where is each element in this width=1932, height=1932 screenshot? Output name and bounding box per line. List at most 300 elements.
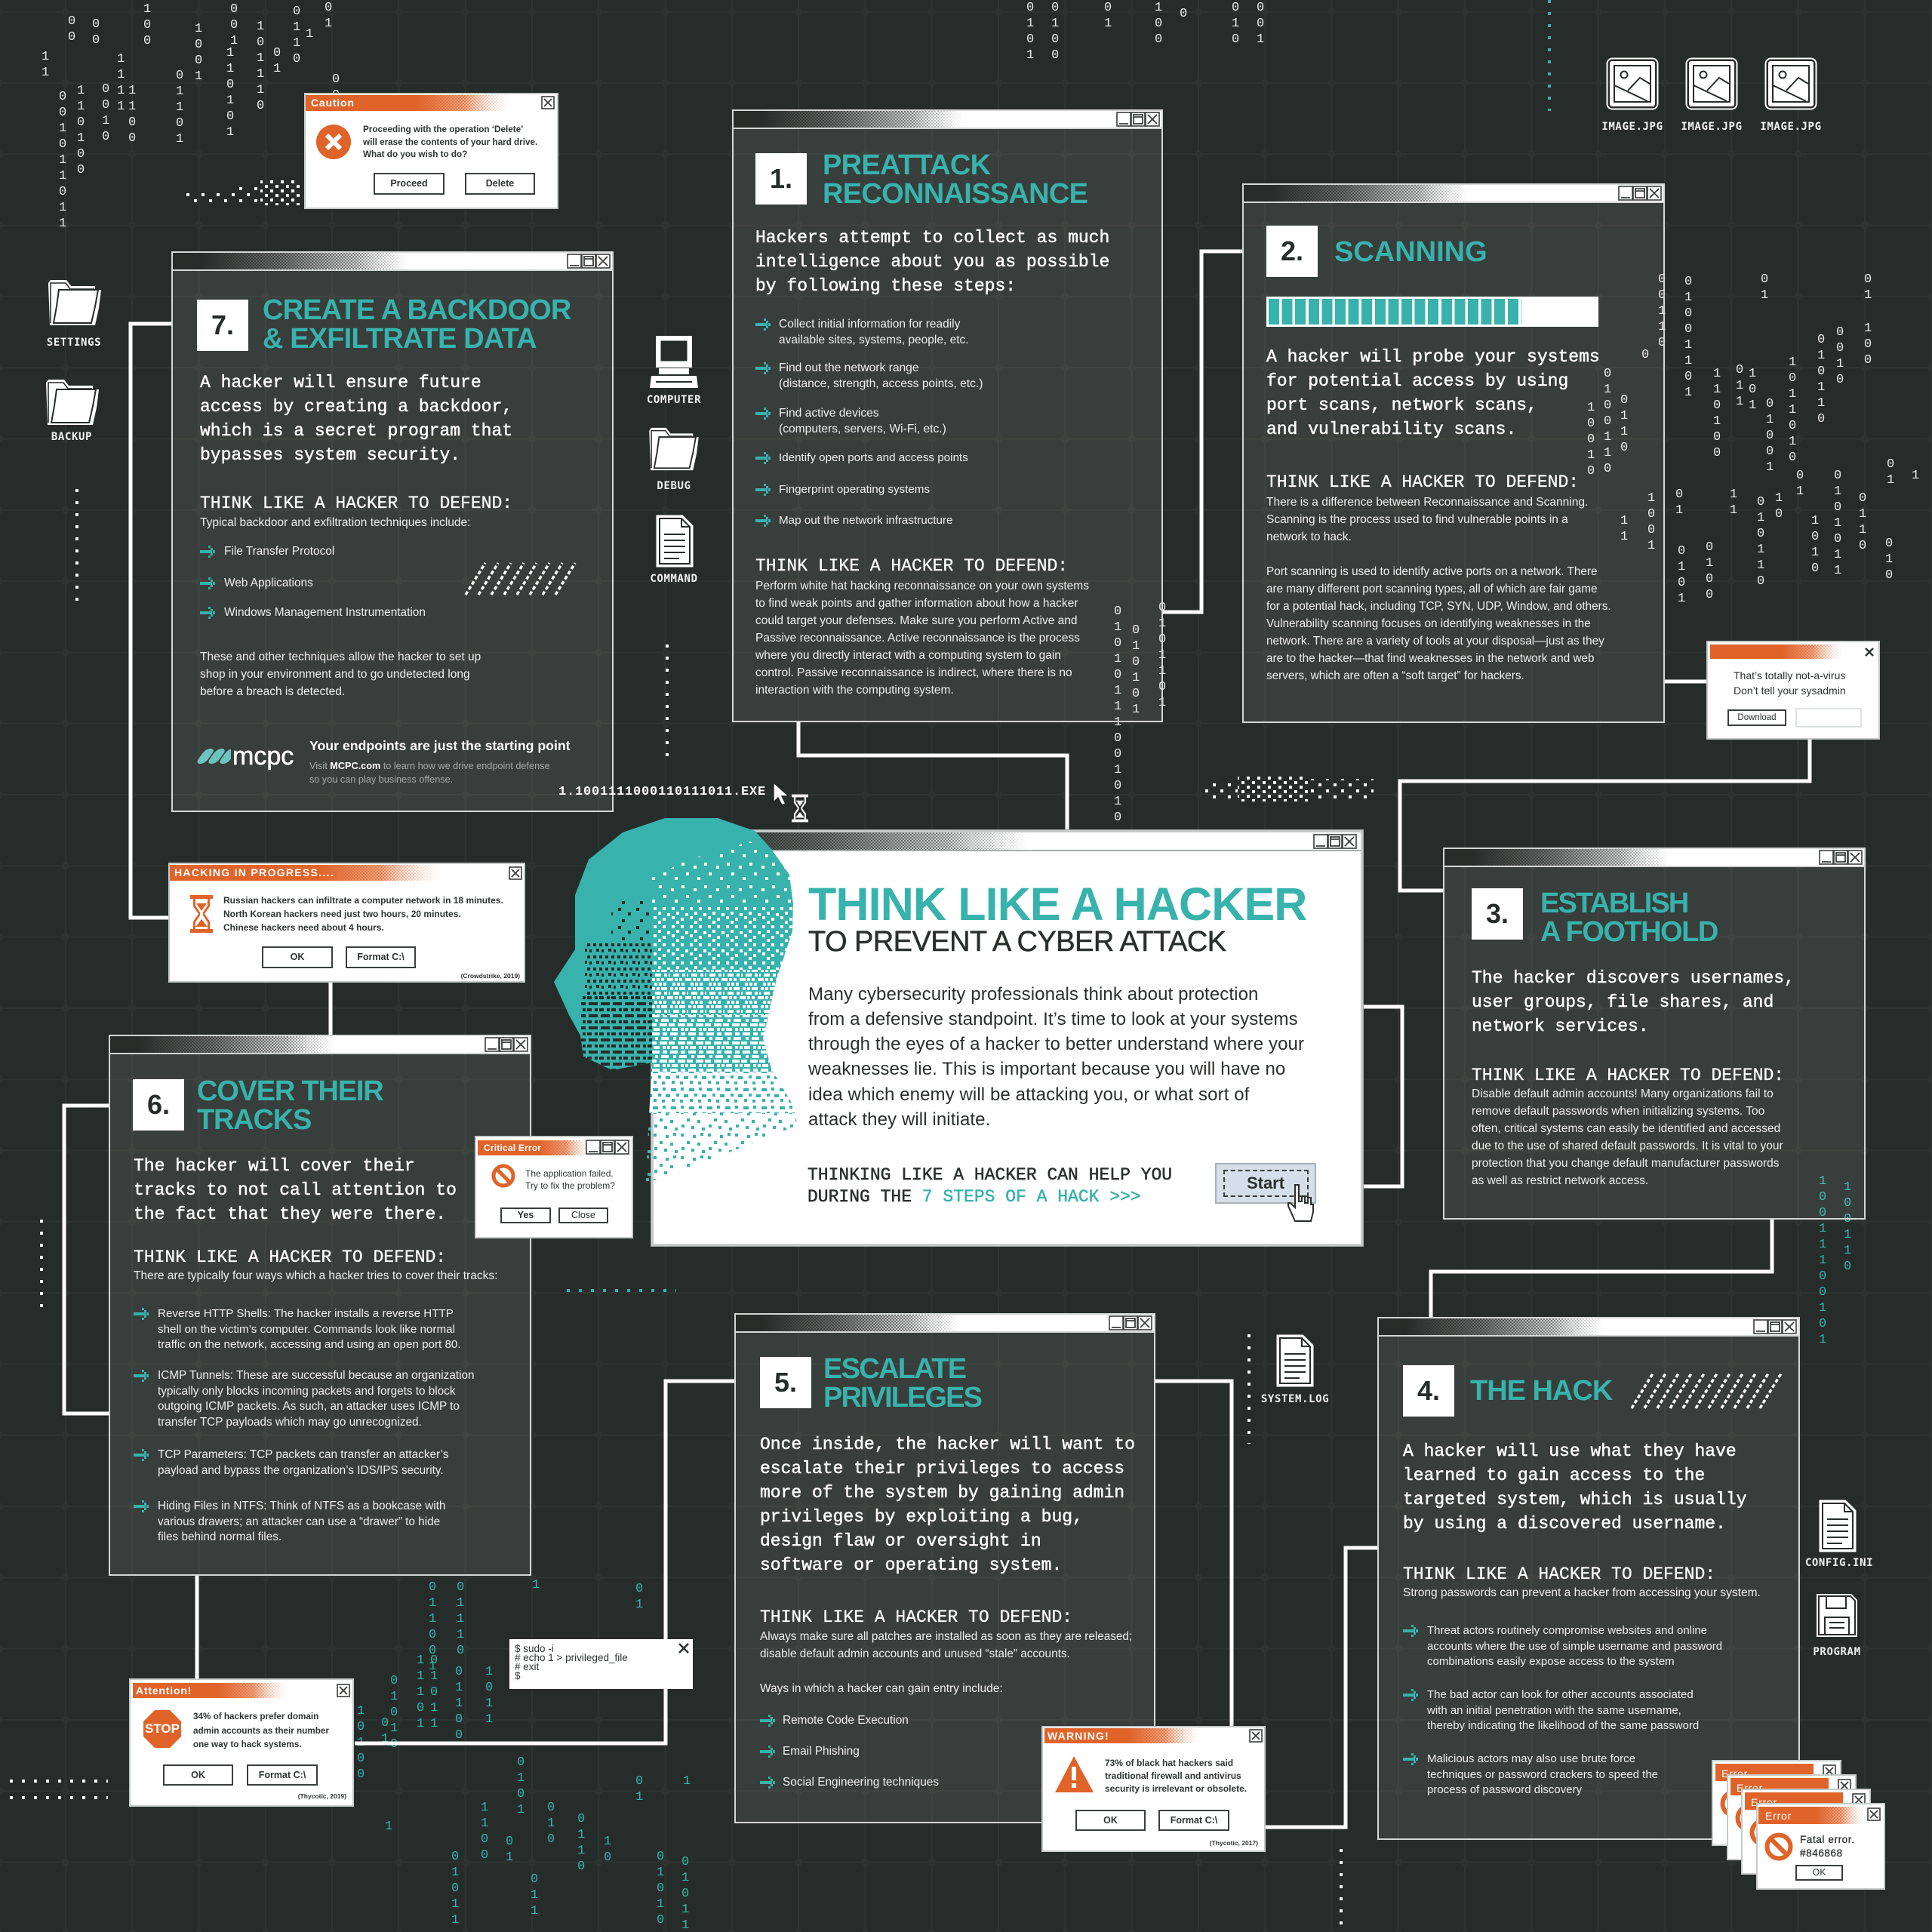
arrow bullets (755, 318, 771, 331)
binary rain: bottom teal: 10 (604, 1835, 611, 1865)
binary rain: right: 00110 (1658, 272, 1666, 350)
defend heading: THINK LIKE A HACKER TO DEFEND: (755, 556, 1068, 576)
icon: backup folder (26, 379, 117, 442)
icon: warning triangle (1054, 1755, 1094, 1793)
icon: system log document (1250, 1334, 1340, 1404)
bullet text: shell on the victim’s computer. Commands look like normal (158, 1322, 455, 1336)
defend text: Scanning is the process used to find vulnerable points in a (1266, 513, 1568, 526)
heading: SCANNING (1334, 236, 1487, 268)
icon: backup folder: BACKUP (51, 431, 92, 443)
intro text: from a defensive standpoint. It’s time to look at your systems (808, 1009, 1298, 1029)
binary rain: right: 1010 (1811, 514, 1819, 576)
bullet text: traffic on the network, accessing and using an open port 80. (158, 1338, 461, 1351)
lead text: bypasses system security. (200, 445, 460, 465)
binary rain: top left: 110100 (77, 84, 85, 177)
lead text: escalate their privileges to access (760, 1459, 1124, 1478)
icon: config document (1794, 1500, 1884, 1568)
intro text (808, 984, 1304, 1130)
panel: step 1 preattack reconnaissance: Map out the network infrastructure (779, 514, 952, 527)
buttons: OK (191, 1770, 205, 1780)
icon: image file 1 (1587, 57, 1678, 133)
bullet text: Collect initial information for readily (779, 318, 960, 331)
buttons (163, 1764, 318, 1786)
intro text: idea which enemy will be attacking you, or what sort of (808, 1084, 1249, 1105)
closing text: before a breach is detected. (200, 685, 345, 698)
binary rain: right: 110100 (1713, 367, 1721, 460)
message (363, 124, 537, 162)
defend text: could target your defenses. Make sure you perform Active and (755, 614, 1077, 627)
progress bar (1266, 297, 1598, 327)
icon: hand cursor (1286, 1183, 1315, 1223)
arrow bullets (1403, 1625, 1418, 1637)
binary rain: bottom teal: 0110 (577, 1812, 585, 1874)
step number (1266, 226, 1318, 277)
heading: ESTABLISH (1540, 888, 1687, 919)
binary rain: bottom teal: 01010 (390, 1674, 398, 1752)
dotted dither band: centre right (1205, 777, 1374, 801)
lead text: for potential access by using (1266, 371, 1568, 391)
icon: settings folder (29, 279, 119, 349)
defend text 2: servers, which are often a “soft target” for hackers. (1266, 669, 1524, 682)
bullet text: accounts where the use of simple username and password (1427, 1639, 1722, 1653)
panel: step 6 cover their tracks: Hiding Files in NTFS: Think of NTFS as a bookcase with (158, 1500, 445, 1512)
dialog: attention: Attention! (136, 1684, 192, 1697)
start button (1215, 1163, 1316, 1204)
dialog: caution: Caution (311, 97, 355, 109)
icon: computer: COMPUTER (647, 394, 701, 406)
white dither on head (651, 838, 801, 1075)
lead text: A hacker will use what they have (1403, 1441, 1737, 1461)
dialog: hacking in progress: HACKING IN PROGRESS.... (174, 866, 334, 878)
binary rain: right: 010110 (1757, 495, 1764, 589)
hatch decoration (1630, 1374, 1782, 1409)
icon: image file 1: IMAGE.JPG (1601, 121, 1663, 133)
head illustration (554, 818, 797, 1181)
lead text: by using a discovered username. (1403, 1514, 1726, 1534)
lead text (755, 228, 1109, 296)
panel: step 1 preattack reconnaissance: Find active devices (779, 407, 879, 420)
binary rain: right: 01 (1864, 272, 1872, 303)
binary rain: right: 1 (1912, 469, 1919, 483)
step number: 3. (1486, 898, 1509, 929)
buttons (374, 173, 535, 195)
panel: centre intro window (651, 830, 1363, 1246)
binary rain: top centre: 100 (1155, 1, 1162, 47)
message: traditional firewall and antivirus (1105, 1770, 1241, 1781)
panel: step 1 preattack reconnaissance: (computers, servers, Wi-Fi, etc.) (779, 423, 946, 435)
binary rain: top left: 01 (325, 1, 332, 31)
message: That’s totally not-a-virus (1734, 669, 1845, 681)
panel: step 4 the hack: techniques or password crackers to speed the (1427, 1767, 1658, 1781)
dialog: warning (1041, 1726, 1266, 1852)
icon: program floppy: PROGRAM (1813, 1646, 1861, 1658)
call to action: DURING THE 7 STEPS OF A HACK >>> (808, 1186, 1141, 1206)
icon: system log document: SYSTEM.LOG (1261, 1393, 1329, 1405)
download button and bar: Download (1737, 713, 1777, 722)
defend heading: THINK LIKE A HACKER TO DEFEND: (200, 494, 512, 513)
icon: command document (629, 515, 719, 584)
buttons: Format C:\ (357, 952, 405, 962)
binary rain: panel 1 edge: 010101 (1132, 623, 1140, 717)
binary rain: right: 10 (1775, 491, 1783, 521)
heading: & EXFILTRATE DATA (263, 323, 537, 355)
message: will erase the contents of your hard drive. (363, 137, 537, 147)
message: What do you wish to do? (363, 149, 467, 159)
lead text: privileges by exploiting a bug, (760, 1507, 1083, 1527)
arrow bullets (760, 1715, 775, 1727)
binary rain: bottom teal: 1 (532, 1578, 540, 1592)
icon: debug folder (629, 427, 719, 492)
binary rain: bottom teal: 1 (683, 1774, 691, 1789)
binary rain: right: 010 (1885, 537, 1893, 583)
defend text: due to the use of shared default passwords. It is vital to your (1472, 1140, 1783, 1152)
binary rain: top left: 101110 (257, 20, 264, 113)
intro text: through the eyes of a hacker to better understand where your (808, 1034, 1304, 1054)
bullet text: combinations easily expose access to the system (1427, 1655, 1675, 1668)
heading: CREATE A BACKDOOR (263, 294, 571, 326)
tagline: Your endpoints are just the starting point (309, 738, 571, 753)
binary rain: bottom teal: 01010 (657, 1850, 664, 1927)
binary rain: top left (42, 1, 340, 231)
message: The application failed. (525, 1168, 614, 1179)
mcpc note (309, 761, 550, 785)
solid teal face (554, 818, 793, 1072)
dialog: hacking in progress (168, 863, 525, 983)
binary rain: right: 0100 (1706, 540, 1713, 602)
dotted dither band: top left (186, 180, 300, 205)
step number: 1. (770, 163, 792, 194)
defend text (755, 580, 1089, 697)
step number: 7. (211, 309, 234, 340)
dialog: critical error: Critical Error (484, 1143, 541, 1153)
panel: step 1 preattack reconnaissance: Identify open ports and access points (779, 451, 968, 464)
binary rain: right: 010110 (1817, 333, 1825, 426)
defend text: Always make sure all patches are installed as soon as they are released; (760, 1630, 1132, 1643)
lead text: A hacker will ensure future (200, 373, 481, 392)
binary rain: bottom teal: 01 (635, 1582, 643, 1612)
panel: step 4 the hack: The bad actor can look for other accounts associated (1427, 1688, 1694, 1701)
dialog: warning: WARNING! (1048, 1730, 1109, 1742)
heading: COVER THEIR (197, 1075, 383, 1107)
arrow bullets (200, 546, 215, 558)
binary rain: right: 01001101 (1684, 275, 1692, 400)
dialog stack: errors (1712, 1760, 1885, 1890)
defend text: Perform white hat hacking reconnaissance on your own systems (755, 580, 1089, 592)
mcpc note: so you can play business offense. (309, 774, 453, 785)
icon: command document: COMMAND (650, 573, 698, 585)
close icon (678, 1643, 689, 1654)
binary rain: top centre: 0 (1180, 7, 1187, 21)
hatch decoration (465, 562, 577, 595)
lead text: Hackers attempt to collect as much (755, 228, 1109, 248)
step number: 4. (1417, 1375, 1440, 1406)
bullet text: Reverse HTTP Shells: The hacker installs a reverse HTTP (158, 1307, 454, 1320)
icon: image file 3 (1746, 57, 1836, 133)
lead text: tracks to not call attention to (134, 1180, 457, 1200)
lead text: by following these steps: (755, 276, 1016, 296)
binary rain: right: 0 (1641, 348, 1649, 362)
closing text (200, 651, 481, 698)
step number (1403, 1365, 1454, 1417)
message: one way to hack systems. (193, 1740, 302, 1749)
binary rain: bottom teal (357, 1578, 691, 1932)
lead text (760, 1435, 1135, 1575)
defend text 2: Port scanning is used to identify active ports on a network. There (1266, 565, 1597, 578)
binary rain: right: 0010 (1836, 325, 1844, 387)
binary rain: top centre: 0101 (1026, 1, 1034, 63)
intro text: weaknesses lie. This is important because you will have no (808, 1059, 1285, 1079)
panel: step 5 escalate privileges: Social Engineering techniques (783, 1776, 939, 1789)
binary rain: top left: 1001 (195, 22, 202, 84)
binary rain: top left: 00 (92, 17, 100, 48)
dialog: critical error (475, 1136, 633, 1238)
binary rain: top left: 001011011 (59, 90, 66, 231)
binary rain: bottom teal: 01 (506, 1835, 513, 1865)
buttons (500, 1208, 608, 1223)
dialog stack: errors: #846868 (1800, 1847, 1843, 1859)
lead text: Once inside, the hacker will want to (760, 1435, 1135, 1454)
bullet text (779, 318, 969, 346)
lead text (1266, 347, 1600, 439)
step number (755, 153, 807, 205)
terminal text: $ sudo -i (515, 1643, 554, 1654)
icon: error circle (316, 125, 351, 159)
terminal window (509, 1639, 693, 1689)
lead text: network services. (1472, 1017, 1649, 1036)
binary rain: right: 01 (1761, 272, 1768, 303)
buttons: OK (1103, 1815, 1118, 1826)
panel: step 6 cover their tracks: transfer TCP payloads which may go unrecognized. (158, 1416, 422, 1428)
binary rain: bottom teal: 01110 (457, 1580, 464, 1658)
binary rain: right: 0100110 (1604, 367, 1611, 476)
lead text (134, 1156, 457, 1224)
message: Don’t tell your sysadmin (1734, 685, 1846, 697)
binary rain: panel 1 edge: 0101101 (1158, 601, 1166, 710)
bullet text (1427, 1624, 1722, 1668)
binary rain: top left: 001 (230, 2, 238, 48)
call to action: THINKING LIKE A HACKER CAN HELP YOU (808, 1165, 1172, 1185)
binary rain: top left: 1 (306, 27, 313, 42)
heading: RECONNAISSANCE (823, 178, 1088, 210)
message: North Korean hackers need just two hours, 20 minutes. (223, 909, 461, 919)
defend heading: THINK LIKE A HACKER TO DEFEND: (760, 1607, 1072, 1627)
step number (133, 1079, 184, 1131)
dialog stack: errors: OK (1812, 1867, 1826, 1878)
dialog stack: errors: Fatal error. (1800, 1834, 1854, 1845)
lead text: learned to gain access to the (1403, 1466, 1705, 1485)
binary rain: top centre (1026, 1, 1264, 63)
binary rain: right: 0101 (1678, 544, 1685, 606)
binary rain: right: 10010 (1587, 401, 1595, 478)
message (1734, 668, 1846, 698)
heading: TRACKS (197, 1104, 311, 1136)
panel: step 4 the hack: Malicious actors may also use brute force (1427, 1752, 1635, 1765)
message: Try to fix the problem? (525, 1180, 615, 1191)
source: (Crowdstrike, 2019) (461, 972, 520, 980)
buttons: OK (291, 952, 304, 962)
step number (760, 1357, 811, 1408)
start button: Start (1247, 1174, 1284, 1192)
bullet text: available sites, systems, people, etc. (779, 334, 969, 346)
binary rain: right: 011 (1736, 363, 1743, 409)
panel: step 7 create a backdoor: Web Applications (224, 577, 313, 589)
buttons: Proceed (390, 178, 428, 189)
icon: arrow cursor (773, 782, 791, 808)
dialog stack: errors: Error (1751, 1796, 1777, 1808)
lead text: The hacker discovers usernames, (1472, 968, 1795, 988)
icon: program floppy (1792, 1593, 1882, 1657)
binary rain: top left: 110101 (226, 46, 234, 140)
dialog: caution (304, 93, 558, 209)
mcpc note: Visit MCPC.com to learn how we drive endpoint defense (309, 761, 550, 771)
panel: step 5 escalate privileges: Email Phishing (783, 1745, 860, 1758)
defend text: Disable default admin accounts! Many organizations fail to (1472, 1088, 1774, 1100)
intro text: attack they will initiate. (808, 1109, 990, 1130)
panel: step 6 cover their tracks: outgoing ICMP packets. As such, an attacker uses ICMP to (158, 1400, 460, 1413)
icon: config document: CONFIG.INI (1805, 1557, 1873, 1569)
binary rain: top left: 01101 (176, 69, 183, 146)
binary rain: bottom teal: 01 (381, 1716, 389, 1746)
defend text: Strong passwords can prevent a hacker from accessing your system. (1403, 1586, 1761, 1599)
panel: step 6 cover their tracks: various drawers; an attacker can use a “drawer” to hide (158, 1515, 440, 1527)
step number (1472, 888, 1523, 940)
binary rain: bottom teal: 010 (547, 1801, 555, 1847)
lead text: targeted system, which is usually (1403, 1490, 1746, 1509)
binary rain: top centre: 010 (1232, 1, 1239, 47)
defend heading: THINK LIKE A HACKER TO DEFEND: (134, 1247, 446, 1267)
panel: step 1 preattack reconnaissance: (distance, strength, access points, etc.) (779, 377, 983, 389)
message: Chinese hackers need about 4 hours. (223, 922, 384, 933)
mcpc logo: mcpc (232, 742, 294, 771)
binary rain: bottom teal: 11101 (417, 1654, 424, 1731)
defend text: Passive reconnaissance. Active reconnaissance is the process (755, 632, 1080, 645)
icon: settings folder: SETTINGS (47, 337, 101, 349)
panel: step 6 cover their tracks: typically only blocks incoming packets and forgets to block (158, 1384, 456, 1398)
binary rain: right: 0101011 (1834, 469, 1841, 578)
panel: step 4 the hack: process of password discovery (1427, 1783, 1582, 1796)
panel: step 5 escalate privileges (734, 1313, 1155, 1823)
lead text: A hacker will probe your systems (1266, 347, 1600, 367)
ways text: Ways in which a hacker can gain entry include: (760, 1682, 1003, 1695)
panel: step 7 create a backdoor (171, 251, 614, 812)
defend text: where you directly interact with a computing system to gain (755, 649, 1061, 662)
binary rain: right: 0110 (1620, 393, 1628, 455)
binary rain: right: 11 (1730, 488, 1737, 518)
message: Proceeding with the operation ‘Delete’ (363, 125, 523, 134)
step number: 6. (147, 1089, 170, 1120)
heading (263, 294, 571, 355)
message: 73% of black hat hackers said (1105, 1758, 1233, 1768)
panel: step 6 cover their tracks: files behind normal files. (158, 1531, 281, 1543)
defend text: network to hack. (1266, 531, 1352, 543)
message (525, 1168, 615, 1192)
icon: debug folder: DEBUG (657, 480, 691, 492)
binary rain: top centre: 001 (1257, 1, 1264, 47)
binary rain: teal near step 3: 100110 (1844, 1180, 1851, 1274)
defend text: disable default admin accounts and unused “stale” accounts. (760, 1647, 1070, 1660)
binary rain: top left: 1111 (117, 52, 125, 114)
message: security is irrelevant or obsolete. (1105, 1783, 1247, 1794)
defend text 2: for a potential hack, including TCP, SYN, UDP, Window, and others. (1266, 600, 1611, 613)
heading (823, 149, 1088, 210)
bullet text (158, 1307, 461, 1351)
message: admin accounts as their number (193, 1725, 329, 1736)
terminal text (515, 1644, 628, 1681)
defend text 2: are many different port scanning types, all of which are fair game (1266, 583, 1597, 595)
panel: step 4 the hack: thereby indicating the likelihood of the same password (1427, 1719, 1699, 1732)
neck dither (645, 1072, 804, 1113)
defend text 2: network. There are a variety of tools at your disposal—just as they (1266, 635, 1604, 648)
defend text (760, 1630, 1132, 1660)
lead text: the fact that they were there. (134, 1204, 446, 1224)
binary rain: bottom teal: 01100 (455, 1665, 463, 1743)
lead text (199, 373, 512, 465)
binary rain: right: 11 (1620, 514, 1628, 544)
binary rain: right: 01 (1675, 488, 1683, 518)
binary rain: top left: 00 (332, 72, 340, 103)
message: 34% of hackers prefer domain (193, 1712, 318, 1721)
intro text: Many cybersecurity professionals think about protection (808, 984, 1258, 1004)
lead text: intelligence about you as possible (755, 252, 1109, 272)
defend text 2: are to the hacker—that find weaknesses in the network and web (1266, 652, 1595, 665)
icon: image file 2: IMAGE.JPG (1681, 121, 1743, 133)
filename text: 1.1001111000110111011.EXE (558, 785, 766, 799)
dark dither on face (611, 901, 649, 940)
buttons: Yes (518, 1210, 534, 1220)
step number (197, 300, 248, 351)
step number: 2. (1281, 235, 1303, 266)
dialog: not-a-virus (1706, 641, 1880, 740)
message: Russian hackers can infiltrate a computer network in 18 minutes. (223, 895, 503, 906)
icon: computer (629, 335, 719, 406)
lead text (1402, 1441, 1746, 1534)
subtitle: TO PREVENT A CYBER ATTACK (808, 926, 1226, 958)
icon: stop sign (143, 1710, 181, 1748)
binary rain: bottom teal: 011001 (429, 1580, 436, 1674)
binary rain: top left: 1100 (128, 84, 136, 146)
lead text: The hacker will cover their (134, 1156, 415, 1176)
binary rain: top centre: 01 (1104, 1, 1112, 31)
dialog: attention (129, 1678, 354, 1807)
defend heading: THINK LIKE A HACKER TO DEFEND: (1266, 472, 1579, 492)
step number: 5. (774, 1367, 797, 1398)
binary rain: right: 0110 (1859, 491, 1866, 553)
heading (197, 1075, 383, 1136)
binary rain: top left: 01 (273, 46, 281, 76)
defend text: Typical backdoor and exfiltration techniques include: (200, 516, 470, 529)
panel: step 4 the hack (1377, 1317, 1800, 1840)
lead text: software or operating system. (760, 1555, 1062, 1575)
defend text 2: Vulnerability scanning focuses on identifying weaknesses in the (1266, 617, 1591, 630)
source: (Thycotic, 2017) (1210, 1839, 1258, 1847)
terminal text: $ (515, 1670, 521, 1681)
icon: hourglass (190, 895, 213, 933)
icon: hourglass cursor (792, 794, 808, 823)
heading: THE HACK (1470, 1375, 1612, 1407)
lead text: user groups, file shares, and (1472, 992, 1774, 1012)
arrow bullets (134, 1308, 149, 1320)
panel: step 2 scanning (1242, 183, 1665, 723)
mcpc logo (198, 742, 294, 771)
defend text: often, critical systems can easily be identified and accessed (1472, 1122, 1780, 1135)
heading (823, 1353, 981, 1414)
terminal text: # echo 1 > privileged_file (515, 1652, 628, 1663)
heading: PRIVILEGES (823, 1382, 981, 1414)
panel: step 1 preattack reconnaissance: Find out the network range (779, 361, 919, 374)
panel: step 1 preattack reconnaissance: Fingerprint operating systems (779, 483, 930, 496)
defend text: control. Passive reconnaissance is indirect, where there is no (755, 666, 1072, 679)
binary rain: bottom teal: 1011 (485, 1665, 493, 1727)
